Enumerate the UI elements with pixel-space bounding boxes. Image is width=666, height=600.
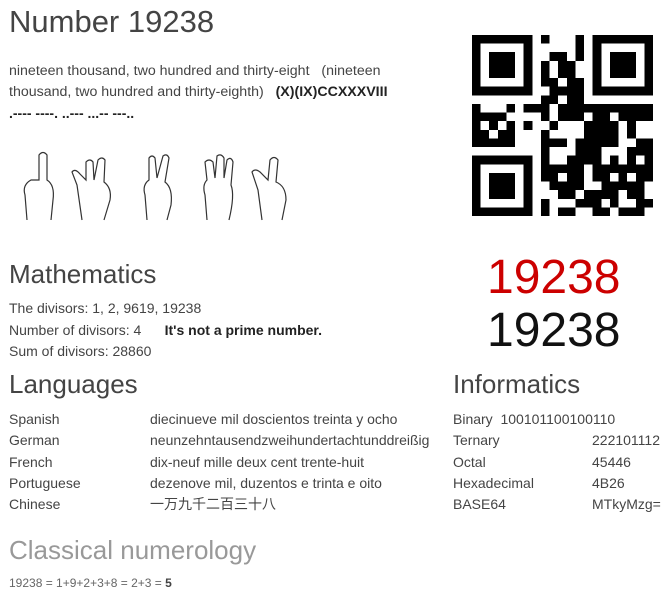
languages table — [9, 411, 429, 512]
text: diecinueve mil doscientos treinta y ocho — [150, 411, 397, 427]
heading: informatics: Informatics — [453, 369, 580, 399]
icon: hands — [24, 152, 287, 220]
informatics table: Ternary — [453, 432, 500, 448]
text block: divisors — [9, 300, 322, 359]
black number: 19238 — [487, 304, 620, 357]
text block: divisors: Number of divisors: 4 It's not a prime number. — [9, 322, 322, 338]
text: dezenove mil, duzentos e trinta e oito — [150, 475, 382, 491]
text: Chinese — [9, 496, 60, 512]
numerology formula: 19238 = 1+9+2+3+8 = 2+3 = 5 — [9, 576, 172, 590]
informatics table: Hexadecimal — [453, 475, 534, 491]
morse code: .---- ----. ..--- ...-- ---.. — [9, 105, 134, 121]
heading: languages: Languages — [9, 369, 138, 399]
informatics table: BASE64 — [453, 496, 506, 512]
informatics table: Octal — [453, 454, 486, 470]
informatics table: MTkyMzg= — [592, 496, 661, 512]
informatics table — [453, 411, 661, 512]
text: neunzehntausendzweihundertachtunddreißig — [150, 432, 429, 448]
red number: 19238 — [487, 251, 620, 304]
informatics table: 4B26 — [592, 475, 625, 491]
heading: mathematics: Mathematics — [9, 259, 156, 289]
text: French — [9, 454, 53, 470]
text block: number name: thousand, two hundred and thirty-eighth) (X)(IX)CCXXXVIII — [9, 84, 388, 100]
text: Spanish — [9, 411, 60, 427]
text block: number name — [9, 63, 388, 100]
text: 一万九千二百三十八 — [150, 496, 276, 512]
text block: divisors: The divisors: 1, 2, 9619, 19238 — [9, 300, 201, 316]
heading: classical numerology: Classical numerology — [9, 535, 256, 565]
informatics table: 45446 — [592, 454, 631, 470]
text block: divisors: Sum of divisors: 28860 — [9, 343, 151, 359]
text block: number name: nineteen thousand, two hundred and thirty-eight (nineteen — [9, 63, 381, 79]
text: Portuguese — [9, 475, 81, 491]
informatics table: Binary 100101100100110 — [453, 411, 615, 427]
text: dix-neuf mille deux cent trente-huit — [150, 454, 364, 470]
text: German — [9, 432, 60, 448]
qr code — [472, 35, 653, 216]
title: Number 19238 — [9, 4, 214, 39]
informatics table: 222101112 — [592, 432, 660, 448]
